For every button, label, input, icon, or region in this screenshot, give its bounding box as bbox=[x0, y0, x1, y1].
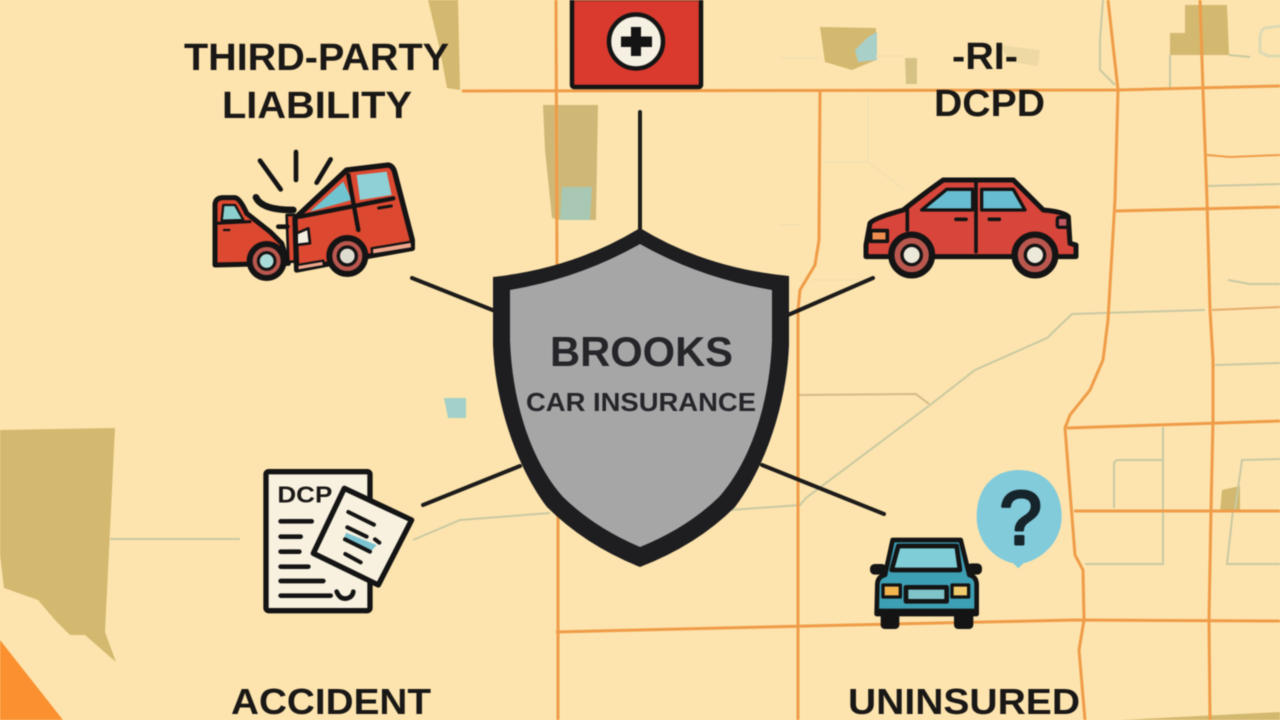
question mark: ? bbox=[1000, 476, 1042, 561]
question bubble bbox=[977, 470, 1062, 568]
left car bbox=[215, 198, 288, 265]
back page lines bbox=[281, 521, 353, 599]
right car bbox=[295, 165, 412, 270]
orange corner bbox=[0, 640, 63, 720]
back page bbox=[266, 472, 370, 611]
map minor roads bbox=[110, 0, 1280, 564]
icon: documents bbox=[266, 472, 412, 611]
mirrors bbox=[870, 564, 887, 575]
icon: first aid kit bbox=[572, 0, 701, 87]
crumpled hood bbox=[287, 215, 295, 262]
icon: red sedan bbox=[866, 180, 1076, 275]
headlights bbox=[883, 585, 900, 597]
lights bbox=[871, 231, 887, 241]
label: third-party liability: THIRD-PARTY bbox=[184, 37, 449, 79]
windows bbox=[922, 189, 973, 210]
icon: uninsured car with question bubble bbox=[870, 470, 1062, 629]
back page heading: DCP bbox=[277, 482, 332, 508]
wheels bbox=[250, 244, 284, 278]
car body bbox=[877, 540, 977, 614]
wheels bbox=[891, 235, 932, 275]
map water patches bbox=[444, 32, 877, 418]
map main roads bbox=[462, 0, 1280, 720]
grille bbox=[906, 587, 947, 601]
front page bbox=[313, 488, 412, 585]
connector lines bbox=[412, 112, 884, 514]
bumpers bbox=[297, 261, 324, 271]
label: DCPD: DCPD bbox=[934, 83, 1045, 125]
label: third-party liability bbox=[184, 37, 449, 127]
icon: car crash bbox=[215, 152, 412, 278]
shield subtitle: CAR INSURANCE bbox=[526, 387, 756, 417]
front page lines bbox=[345, 512, 379, 562]
central shield bbox=[493, 228, 789, 567]
tires bbox=[881, 608, 899, 629]
shield title: BROOKS bbox=[550, 328, 733, 375]
windshield bbox=[892, 546, 960, 570]
door line and handles bbox=[907, 183, 999, 252]
label: third-party liability: LIABILITY bbox=[222, 85, 412, 127]
shield outer and inner bbox=[493, 228, 789, 567]
impact marks bbox=[260, 152, 331, 189]
front page highlight bbox=[344, 533, 377, 551]
car body bbox=[866, 180, 1076, 257]
label: garbled top right: -RI- bbox=[952, 36, 1018, 78]
right car headlight bbox=[297, 228, 310, 245]
